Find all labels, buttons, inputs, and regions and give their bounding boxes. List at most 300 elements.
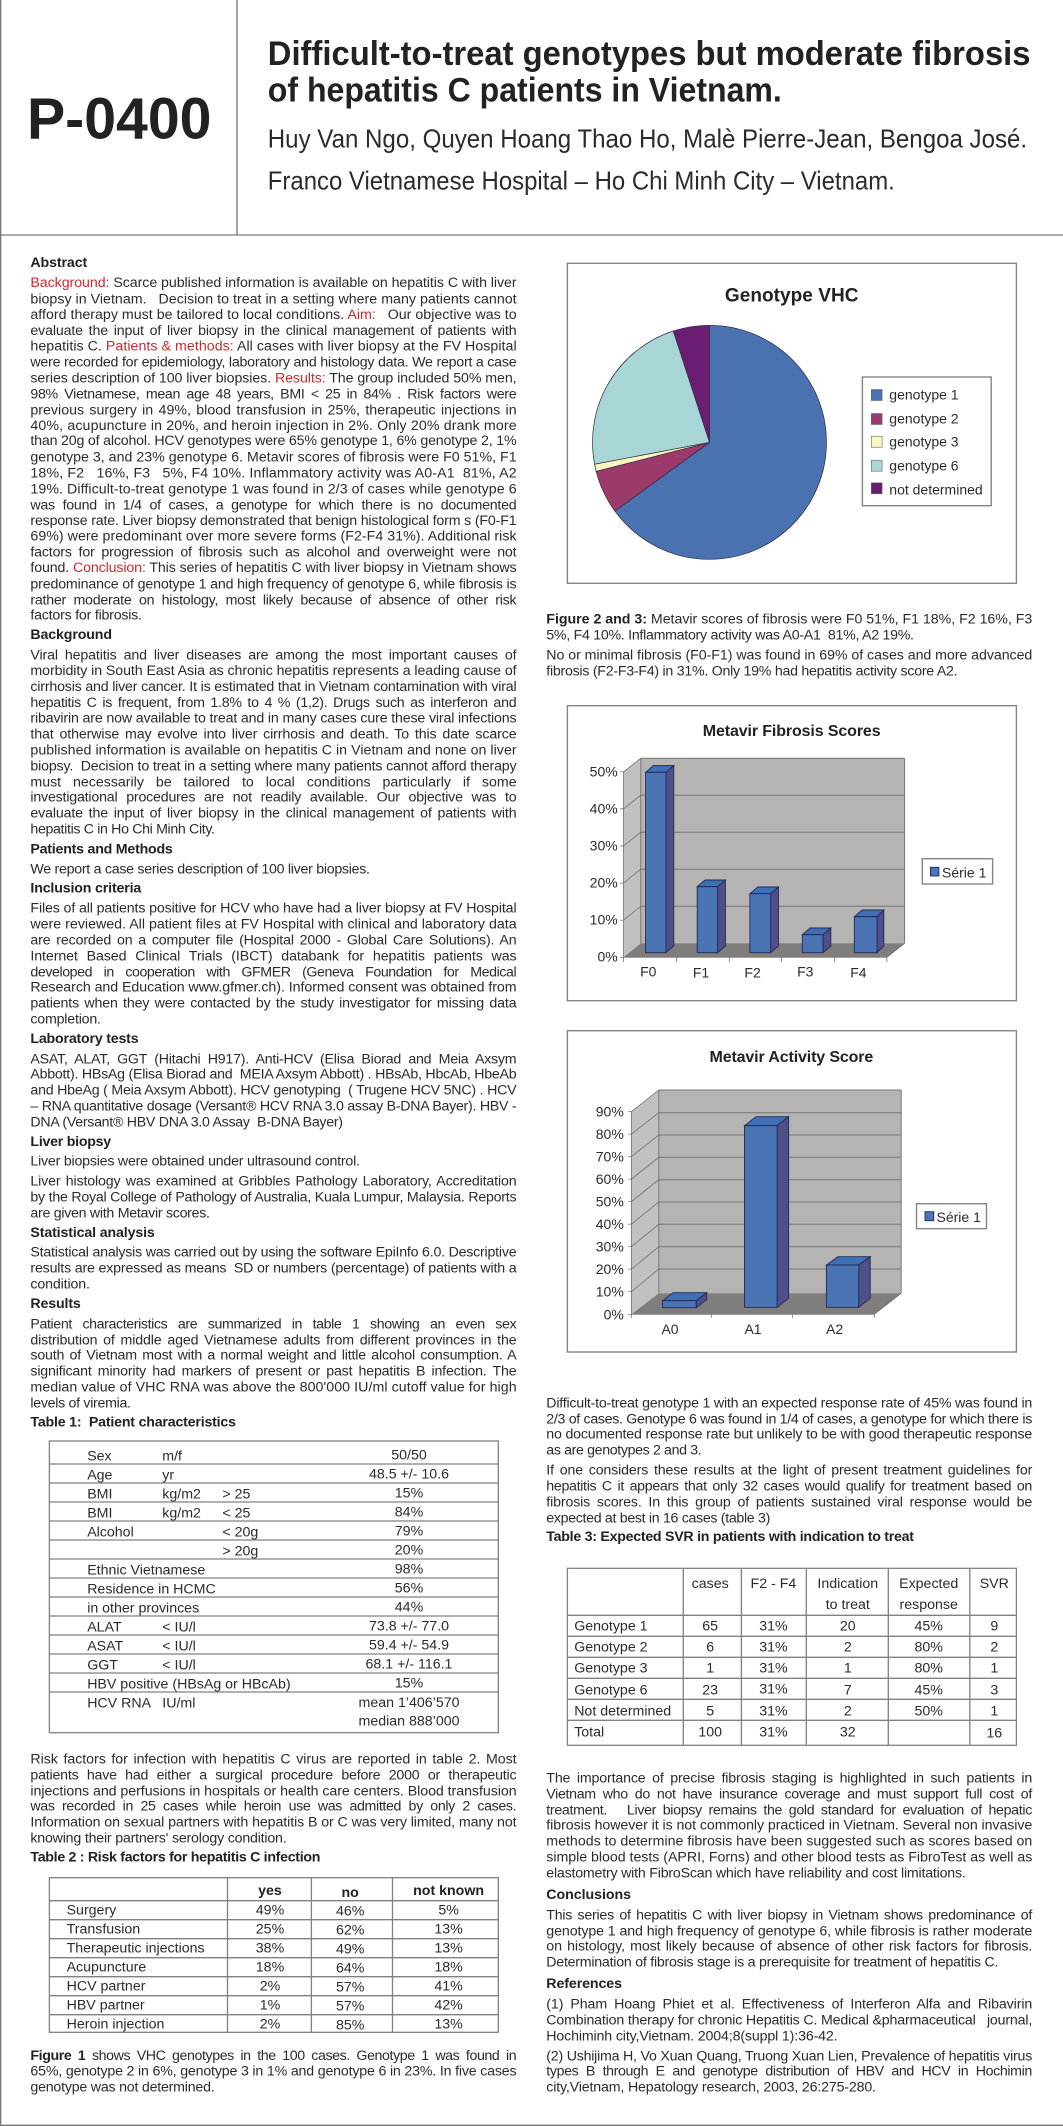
text block: fibrosis staging paragraph: Vietnam who do not have insurance coverage and must support full cost of	[546, 1786, 1032, 1802]
table 3: expected SVR: to treat	[826, 1597, 870, 1613]
bar chart plot	[596, 1090, 901, 1337]
y axis labels: 60%	[596, 1171, 624, 1187]
pie legend	[862, 377, 991, 506]
text block: reference 1: (1) Pham Hoang Phiet et al. Effectiveness of Interferon Alfa and Ribavirin	[546, 1996, 1032, 2012]
text block: abstract body: 40%, acupuncture in 20%, and heroin injection in 2%. Only 20% drank more	[30, 418, 517, 434]
table 1: patient characteristics: 68.1 +/- 116.1	[366, 1657, 453, 1673]
text block: abstract body: than 20g of alcohol. HCV genotypes were 65% genotype 1, 6% genotype 2, 1%	[30, 433, 517, 449]
text block: laboratory body: Abbott). HBsAg (Elisa Biorad and MEIA Axsym Abbott) . HBsAb, HbcAb, HbeAb	[30, 1066, 517, 1082]
text block: abstract body: hepatitis C. Patients & methods: All cases with liver biopsy at the FV Hospital	[30, 338, 517, 354]
affiliation: Franco Vietnamese Hospital – Ho Chi Minh City – Vietnam.	[268, 165, 895, 195]
heading: table 1: Table 1: Patient characteristics	[30, 1415, 236, 1431]
text block: genotype response paragraphs: as are genotypes 2 and 3.	[546, 1442, 702, 1458]
table 3: expected SVR: 1	[990, 1704, 998, 1720]
text block: inclusion body: Internet Based Clinical Trials (IBCT) databank for hepatitis patients was	[30, 948, 517, 964]
heading: laboratory tests: Laboratory tests	[30, 1031, 139, 1047]
table 2: risk factors: 49%	[336, 1942, 365, 1958]
heading: inclusion criteria: Inclusion criteria	[30, 880, 141, 896]
table 2: risk factors	[49, 1878, 498, 2034]
text block: background body: must necessarily be tailored to local conditions particularly if some	[30, 774, 517, 790]
panel: liver biopsy	[30, 1134, 517, 1221]
text block: inclusion body	[29, 900, 517, 1027]
table 1: patient characteristics: 50/50	[391, 1448, 427, 1464]
bars	[646, 766, 884, 953]
y axis labels	[590, 764, 618, 965]
text block: abstract body: factors for fibrosis.	[30, 607, 142, 623]
text block: background body: Viral hepatitis and liver diseases are among the most important causes of	[30, 647, 517, 663]
text block: inclusion body: developed in cooperation with GFMER (Geneva Foundation for Medical	[30, 964, 517, 980]
text block: fibrosis staging paragraph: fibrosis however it is not commonly practiced in Vietnam. Several non invasive	[546, 1817, 1032, 1833]
chart title: Genotype VHC	[725, 286, 859, 307]
heading: table 2: Table 2 : Risk factors for hepatitis C infection	[30, 1850, 320, 1866]
text block: methods intro: We report a case series description of 100 liver biopsies.	[30, 861, 370, 877]
text block: fibrosis staging paragraph	[546, 1770, 1032, 1881]
table 3: expected SVR: 23	[702, 1683, 718, 1699]
table 1: patient characteristics: 20%	[395, 1543, 424, 1559]
y axis labels: 10%	[596, 1284, 624, 1300]
table 2: risk factors: 38%	[256, 1940, 285, 1956]
table 3: expected SVR: Total	[574, 1725, 604, 1741]
text block: genotype response paragraphs: no documented response rate but unlikely to be with good therapeutic response	[546, 1426, 1032, 1442]
panel: conclusions	[546, 1887, 1032, 1970]
table 3: expected SVR: Genotype 6	[574, 1683, 648, 1699]
table 2: risk factors: 13%	[434, 2016, 463, 2032]
text block: risk factors paragraph: knowing their partners' serology condition.	[30, 1830, 287, 1846]
text block: abstract body: 69%) were predominant over more severe forms (F2-F4 31%). Additional risk	[30, 528, 518, 544]
table 3: expected SVR: SVR	[980, 1576, 1009, 1592]
text block: results body: median value of VHC RNA was above the 800'000 IU/ml cutoff value for high	[30, 1379, 517, 1395]
heading: patients and methods: Patients and Methods	[30, 841, 173, 857]
text block: figure 2 and 3 caption: No or minimal fibrosis (F0-F1) was found in 69% of cases and more advanced	[546, 647, 1032, 663]
text block: abstract body: biopsy in Vietnam. Decision to treat in a setting where many patients cannot	[30, 291, 517, 307]
table 3: expected SVR: 31%	[759, 1640, 788, 1656]
chart title: Metavir Activity Score	[710, 1049, 873, 1066]
table 3: expected SVR: F2 - F4	[751, 1576, 796, 1592]
y axis labels: 30%	[596, 1239, 624, 1255]
table 1: patient characteristics	[49, 1441, 498, 1733]
table 2: risk factors: 1%	[260, 1997, 281, 2013]
table 3: expected SVR: 6	[706, 1640, 714, 1656]
table 1: patient characteristics: kg/m2	[162, 1487, 201, 1503]
text block: figure 2 and 3 caption	[546, 611, 1032, 679]
table 2: risk factors: 2%	[260, 2016, 281, 2032]
title	[268, 35, 1030, 110]
pie legend: genotype 3	[889, 434, 959, 450]
table 1: patient characteristics: < IU/l	[162, 1658, 196, 1674]
table 2: risk factors: 13%	[434, 1940, 463, 1956]
y axis labels: 0%	[604, 1306, 624, 1322]
table 3: expected SVR: Genotype 1	[574, 1619, 648, 1635]
text block: liver biopsy body: are given with Metavir scores.	[30, 1205, 210, 1221]
text block: results body: levels of viremia.	[30, 1395, 131, 1411]
table 1: patient characteristics: 79%	[395, 1524, 424, 1540]
table 2: risk factors: 57%	[336, 1999, 365, 2015]
text block: figure 2 and 3 caption: fibrosis (F2-F3-F4) in 31%. Only 19% had hepatitis activity score A2.	[546, 663, 958, 679]
x axis labels: A2	[826, 1321, 843, 1337]
heading: background: Background	[30, 627, 112, 643]
header: title and authors	[268, 35, 1030, 195]
panel: pie chart genotype VHC	[567, 263, 1016, 583]
table 3: expected SVR: 2	[844, 1640, 852, 1656]
table 1: patient characteristics: 84%	[395, 1505, 424, 1521]
panel: background	[30, 627, 518, 837]
table 3: expected SVR	[567, 1568, 1016, 1745]
panel: inclusion criteria	[29, 880, 517, 1027]
table 2: risk factors: 57%	[336, 1980, 365, 1996]
table 1: patient characteristics: 59.4 +/- 54.9	[369, 1638, 449, 1654]
table 3: expected SVR: 45%	[914, 1619, 943, 1635]
table 3: expected SVR: 32	[840, 1725, 856, 1741]
table 2: risk factors: Surgery	[67, 1902, 117, 1918]
table 2: risk factors: Acupuncture	[67, 1959, 146, 1975]
text block: reference 2: types B through E and genotype distribution of HBV and HCV in Hochimin	[546, 2063, 1032, 2079]
x axis labels: F4	[850, 965, 867, 981]
table 1: patient characteristics: < IU/l	[162, 1639, 196, 1655]
text block: inclusion body: patients when they were contacted by the study investigator for missing data	[30, 995, 517, 1011]
table 1: patient characteristics: ASAT	[87, 1639, 124, 1655]
heading: conclusions: Conclusions	[546, 1887, 631, 1903]
text block: background body	[30, 647, 518, 837]
table 1: patient characteristics: > 20g	[222, 1544, 258, 1560]
panel: patients and methods	[30, 841, 370, 877]
table 2: risk factors: 5%	[438, 1902, 459, 1918]
table 1: patient characteristics: 15%	[395, 1486, 424, 1502]
text block: abstract body: rather moderate on histology, most likely because of absence of other risk	[30, 592, 518, 608]
table 2: risk factors: no	[342, 1885, 359, 1901]
table 3: expected SVR: 50%	[914, 1704, 943, 1720]
text block: figure 1 caption	[30, 2048, 517, 2095]
table 2: risk factors: 13%	[434, 1921, 463, 1937]
panel: bar chart metavir activity score	[567, 1031, 1016, 1352]
table 3: expected SVR: 80%	[914, 1661, 943, 1677]
table 1: patient characteristics: > 25	[222, 1487, 251, 1503]
table 2: risk factors: 49%	[256, 1902, 285, 1918]
chart title: Metavir Fibrosis Scores	[703, 723, 881, 740]
text block: abstract body	[29, 275, 518, 623]
text block: results body: Patient characteristics are summarized in table 1 showing an even sex	[30, 1316, 517, 1332]
table 1: patient characteristics: in other provinces	[87, 1601, 199, 1617]
text block: background body: published information is available on hepatitis C in Vietnam and none on liver	[30, 742, 517, 758]
text block: fibrosis staging paragraph: elastometry with FibroScan which have reliability and cost limitations.	[546, 1865, 966, 1881]
text block: abstract body: series description of 100 liver biopsies. Results: The group included 50% men,	[30, 370, 517, 386]
table 1: patient characteristics: Alcohol	[87, 1525, 134, 1541]
table 3: expected SVR: 9	[990, 1619, 998, 1635]
text block: fibrosis staging paragraph: simple blood tests (APRI, Forns) and other blood tests as FibroTest as well as	[546, 1849, 1032, 1865]
chart legend: Série 1	[936, 1209, 981, 1225]
table 2: risk factors: 18%	[434, 1959, 463, 1975]
table 1: patient characteristics: mean 1’406’570	[359, 1695, 460, 1711]
text block: genotype response paragraphs: expected at best in 16 cases (table 3)	[546, 1510, 770, 1526]
text block: abstract body: predominance of genotype 1 and high frequency of genotype 6, while fibrosis is	[30, 576, 517, 592]
text block: liver biopsy body: by the Royal College of Pathology of Australia, Kuala Lumpur, Malaysia. Reports	[30, 1189, 517, 1205]
table 1: patient characteristics: 98%	[395, 1562, 424, 1578]
text block: risk factors paragraph: patients have had either a surgical procedure before 2000 or therapeutic	[30, 1767, 517, 1783]
title: of hepatitis C patients in Vietnam.	[268, 72, 782, 110]
text block: genotype response paragraphs: If one considers these results at the light of present treatment guidelines for	[546, 1462, 1033, 1478]
table 3: expected SVR: 31%	[759, 1618, 788, 1634]
table 3: expected SVR: 80%	[914, 1640, 943, 1656]
table 3: expected SVR: 3	[990, 1683, 998, 1699]
y axis labels: 50%	[590, 764, 618, 780]
x axis labels: F1	[693, 965, 709, 981]
table 1: patient characteristics: < 25	[222, 1506, 251, 1522]
text block: genotype response paragraphs: 2/3 of cases. Genotype 6 was found in 1/4 of cases, a genotype for which there is	[546, 1411, 1032, 1427]
text block: background body: hepatitis C in Ho Chi Minh City.	[30, 821, 215, 837]
heading: table 3: Table 3: Expected SVR in patients with indication to treat	[546, 1529, 914, 1545]
table 3: expected SVR: 45%	[914, 1683, 943, 1699]
table 3: expected SVR: 1	[706, 1661, 714, 1677]
text block: abstract body: factors for progression of fibrosis such as alcohol and overweight were not	[30, 544, 517, 560]
pie legend: genotype 6	[889, 458, 959, 474]
text block: laboratory body: ASAT, ALAT, GGT (Hitachi H917). Anti-HCV (Elisa Biorad and Meia Axsym	[30, 1051, 517, 1067]
text block: reference 1: Combination therapy for chronic Hepatitis C. Medical &pharmaceutical journal,	[546, 2012, 1032, 2028]
text block: figure 2 and 3 caption: Figure 2 and 3: Metavir scores of fibrosis were F0 51%, F1 18%, F2 16%, F3	[546, 611, 1032, 627]
table 1: patient characteristics: median 888’000	[359, 1714, 460, 1730]
table 3: expected SVR: 100	[698, 1725, 722, 1741]
text block: genotype response paragraphs	[546, 1395, 1033, 1526]
text block: background body: cirrhosis and liver cancer. It is estimated that in Vietnam contamination with viral	[30, 679, 517, 695]
x axis labels: F0	[640, 964, 657, 980]
text block: abstract body: was found in 1/4 of cases, a genotype for which there is no documented	[29, 497, 517, 513]
table 2: risk factors: 41%	[434, 1978, 463, 1994]
text block: background body: evaluate the input of liver biopsy in the clinical management of patients with	[30, 805, 517, 821]
y axis labels: 70%	[596, 1149, 624, 1165]
text block: conclusions body: genotype 1 and high frequency of genotype 6, while fibrosis is rather moderate	[546, 1923, 1032, 1939]
table 2: risk factors: Heroin injection	[67, 2016, 164, 2032]
text block: abstract body: evaluate the input of liver biopsy in the clinical management of patients with	[30, 323, 517, 339]
text block: reference 1: Hochiminh city,Vietnam. 2004;8(suppl 1):36-42.	[546, 2028, 838, 2044]
table 1: patient characteristics: Residence in HCMC	[87, 1582, 216, 1598]
y axis labels: 30%	[590, 838, 618, 854]
text block: risk factors paragraph: was recorded in 25 cases while heroin use was admitted by only 2 cases.	[29, 1798, 517, 1814]
y axis labels: 40%	[596, 1216, 624, 1232]
x axis labels: F3	[797, 964, 814, 980]
heading: results: Results	[30, 1296, 81, 1312]
table 1: patient characteristics: kg/m2	[162, 1506, 201, 1522]
text block: inclusion body: Files of all patients positive for HCV who have had a liver biopsy at FV Hospital	[30, 900, 517, 916]
text block: background body: ribavirin are now available to treat and in many cases cure these viral infections	[30, 710, 517, 726]
y axis labels: 40%	[590, 800, 618, 816]
text block: fibrosis staging paragraph: methods to determine fibrosis have been suggested such as scores based on	[546, 1833, 1032, 1849]
text block: background body: hepatitis C is frequent, from 1.8% to 4 % (1,2). Drugs such as interferon and	[30, 695, 517, 711]
table 3: expected SVR: Not determined	[574, 1704, 671, 1720]
text block: reference 1	[546, 1996, 1032, 2044]
text block: abstract body: 19%. Difficult-to-treat genotype 1 was found in 2/3 of cases while genotype 6	[30, 481, 517, 497]
text block: abstract body: 98% Vietnamese, mean age 48 years, BMI < 25 in 84% . Risk factors were	[30, 386, 517, 402]
text block: inclusion body: Research and Education www.gfmer.ch). Informed consent was obtained from	[30, 979, 517, 995]
table 2: risk factors: 2%	[260, 1978, 281, 1994]
text block: results body	[30, 1316, 517, 1411]
text block: liver biopsy body: Liver histology was examined at Gribbles Pathology Laboratory, Accreditation	[30, 1173, 517, 1189]
table 1: patient characteristics: 73.8 +/- 77.0	[369, 1619, 449, 1635]
y axis labels	[596, 1104, 624, 1322]
chart legend	[916, 1204, 986, 1229]
text block: statistical body: results are expressed as means SD or numbers (percentage) of patients with a	[30, 1260, 517, 1276]
table 3: expected SVR: 65	[702, 1619, 718, 1635]
table 1: patient characteristics: < IU/l	[162, 1620, 196, 1636]
text block: statistical body: Statistical analysis was carried out by using the software EpiInfo 6.0. Descriptive	[30, 1244, 517, 1260]
pie legend: genotype 2	[889, 411, 959, 427]
y axis labels: 20%	[590, 874, 618, 890]
text block: conclusions body: This series of hepatitis C with liver biopsy in Vietnam shows predominance of	[546, 1907, 1032, 1923]
table 2: risk factors: Therapeutic injections	[67, 1940, 205, 1956]
table 3: expected SVR: 20	[840, 1619, 856, 1635]
table 1: patient characteristics: ALAT	[87, 1620, 122, 1636]
table 1: patient characteristics: Age	[87, 1468, 113, 1484]
table 3: expected SVR: cases	[692, 1576, 729, 1592]
text block: results body: south of Vietnam most with a normal weight and little alcohol consumption. A	[30, 1347, 517, 1363]
text block: abstract body: genotype 3, and 23% genotype 6. Metavir scores of fibrosis were F0 51%, F1	[30, 449, 517, 465]
text block: abstract body: response rate. Liver biopsy demonstrated that benign histological form s (F0-F1	[30, 513, 517, 529]
table 1: patient characteristics: Sex	[87, 1449, 112, 1465]
text block: background body: investigational procedures are not readily available. Our objective was to	[30, 789, 517, 805]
text block: abstract body: Background: Scarce published information is available on hepatitis C with liver	[30, 275, 517, 291]
text block: abstract body: 18%, F2 16%, F3 5%, F4 10%. Inflammatory activity was A0-A1 81%, A2	[30, 465, 517, 481]
text block: results body: significant minority had markers of present or past hepatitis B infection. The	[30, 1363, 517, 1379]
text block: abstract body: previous surgery in 49%, blood transfusion in 25%, therapeutic injections in	[30, 402, 517, 418]
table 1: patient characteristics: yr	[162, 1468, 174, 1484]
text block: figure 1 caption: Figure 1 shows VHC genotypes in the 100 cases. Genotype 1 was found in	[30, 2048, 517, 2064]
text block: fibrosis staging paragraph: The importance of precise fibrosis staging is highlighted in such patients in	[546, 1770, 1032, 1786]
y axis labels: 20%	[596, 1261, 624, 1277]
text block: inclusion body: completion.	[30, 1011, 101, 1027]
text block: laboratory body: and HbeAg ( Meia Axsym Abbott). HCV genotyping ( Trugene HCV 5NC) . HCV	[30, 1082, 517, 1098]
text block: reference 2: city,Vietnam, Hepatology research, 2003, 26:275-280.	[546, 2079, 876, 2095]
table 3: expected SVR: 2	[844, 1704, 852, 1720]
table 1: patient characteristics: m/f	[162, 1449, 182, 1465]
table 1: patient characteristics: HBV positive (HBsAg or HBcAb)	[87, 1677, 291, 1693]
text block: reference 2	[546, 2048, 1032, 2095]
text block: liver biopsy body	[30, 1153, 517, 1221]
text block: liver biopsy body: Liver biopsies were obtained under ultrasound control.	[30, 1153, 360, 1169]
table 2: risk factors: 42%	[434, 1997, 463, 2013]
text block: inclusion body: are recorded on a computer file (Hospital 2000 - Global Care Solutions). An	[30, 932, 517, 948]
y axis labels: 90%	[596, 1104, 624, 1120]
table 2: risk factors: 85%	[336, 2018, 365, 2034]
panel: laboratory tests	[30, 1031, 517, 1130]
x axis labels: A0	[661, 1321, 679, 1337]
poster number: P-0400	[27, 86, 212, 152]
text block: laboratory body: – RNA quantitative dosage (Versant® HCV RNA 3.0 assay B-DNA Bayer). HBV -	[30, 1098, 517, 1114]
text block: inclusion body: were reviewed. All patient files at FV Hospital with clinical and laboratory data	[29, 916, 517, 932]
text block: figure 1 caption: 65%, genotype 2 in 6%, genotype 3 in 1% and genotype 6 in 23%. In five cases	[30, 2063, 517, 2079]
text block: background body: morbidity in South East Asia as chronic hepatitis represents a leading cause of	[30, 663, 517, 679]
text block: abstract body: were recorded for epidemiology, laboratory and histology data. We report a case	[29, 354, 517, 370]
table 2: risk factors: yes	[258, 1883, 282, 1899]
text block: genotype response paragraphs: fibrosis scores. In this group of patients sustained viral response would be	[546, 1494, 1032, 1510]
table 3: expected SVR: 2	[990, 1640, 998, 1656]
table 1: patient characteristics: 44%	[395, 1600, 424, 1616]
text block: risk factors paragraph: Risk factors for infection with hepatitis C virus are reported in table 2. Most	[30, 1751, 517, 1767]
table 3: expected SVR: Indication	[817, 1576, 878, 1592]
table 3: expected SVR: Genotype 2	[574, 1640, 648, 1656]
text block: background body: biopsy. Decision to treat in a setting where many patients cannot afford therapy	[30, 758, 518, 774]
table 3: expected SVR: 31%	[759, 1661, 788, 1677]
table 3: expected SVR: 1	[990, 1661, 998, 1677]
text block: figure 2 and 3 caption: 5%, F4 10%. Inflammatory activity was A0-A1 81%, A2 19%.	[546, 627, 914, 643]
text block: background body: that otherwise may evolve into liver cirrhosis and death. To this date scarce	[30, 726, 517, 742]
table 3: expected SVR: 7	[844, 1683, 852, 1699]
text block: statistical body: condition.	[30, 1276, 90, 1292]
text block: abstract body: found. Conclusion: This series of hepatitis C with liver biopsy in Vietnam shows	[30, 560, 517, 576]
pie chart	[593, 325, 826, 559]
table 1: patient characteristics: 48.5 +/- 10.6	[369, 1467, 449, 1483]
table 2: risk factors: HBV partner	[67, 1997, 145, 2013]
table 1: patient characteristics: Ethnic Vietnamese	[87, 1563, 205, 1579]
text block: conclusions body: Determination of fibrosis stage is a prerequisite for treatment of hepatitis C.	[546, 1954, 998, 1970]
text block: laboratory body	[30, 1051, 517, 1130]
text block: abstract body: afford therapy must be tailored to local conditions. Aim: Our objective was to	[30, 307, 517, 323]
table 3: expected SVR: response	[900, 1597, 958, 1613]
table 2: risk factors: 64%	[336, 1961, 365, 1977]
table 3: expected SVR: Expected	[899, 1576, 958, 1592]
table 2: risk factors: HCV partner	[67, 1978, 146, 1994]
table 2: risk factors: not known	[413, 1883, 484, 1899]
text block: risk factors paragraph: Information on sexual partners with hepatitis B or C was very limited, many not	[30, 1814, 517, 1830]
heading: statistical analysis: Statistical analysis	[30, 1225, 155, 1241]
text block: statistical body	[30, 1244, 517, 1292]
table 2: risk factors: 25%	[256, 1921, 285, 1937]
text block: results body: distribution of middle aged Vietnamese adults from different provinces in the	[30, 1332, 517, 1348]
table 3: expected SVR: 16	[986, 1725, 1002, 1741]
title: Difficult-to-treat genotypes but moderate fibrosis	[268, 35, 1030, 73]
table 2: risk factors: 46%	[336, 1904, 365, 1920]
y axis labels: 10%	[590, 911, 618, 927]
panel: statistical analysis	[30, 1225, 517, 1292]
table 3: expected SVR: Genotype 3	[574, 1661, 648, 1677]
x axis labels: F2	[744, 965, 761, 981]
table 1: patient characteristics: 56%	[395, 1581, 424, 1597]
table 2: risk factors: Transfusion	[67, 1921, 140, 1937]
panel: references	[546, 1976, 1032, 2095]
table 1: patient characteristics: GGT	[87, 1658, 118, 1674]
text block: conclusions body	[546, 1907, 1032, 1970]
text block: laboratory body: DNA (Versant® HBV DNA 3.0 Assay B-DNA Bayer)	[30, 1114, 343, 1130]
text block: figure 1 caption: genotype was not determined.	[30, 2079, 215, 2095]
y axis labels: 80%	[596, 1126, 624, 1142]
table 3: expected SVR: 31%	[759, 1704, 788, 1720]
table 1: patient characteristics: IU/ml	[162, 1696, 195, 1712]
text block: risk factors paragraph	[29, 1751, 517, 1846]
heading: abstract: Abstract	[30, 255, 87, 271]
chart legend: Série 1	[942, 864, 987, 880]
text block: genotype response paragraphs: Difficult-to-treat genotype 1 with an expected response rate of 45% was found in	[546, 1395, 1032, 1411]
text block: fibrosis staging paragraph: treatment. Liver biopsy remains the gold standard for evaluation of hepatic	[546, 1802, 1032, 1818]
text block: risk factors paragraph: injections and perfusions in hospitals or health care centers. Blood transfusion	[30, 1783, 517, 1799]
table 3: expected SVR: 31%	[759, 1682, 788, 1698]
table 1: patient characteristics: < 20g	[222, 1525, 258, 1541]
table 1: patient characteristics: BMI	[87, 1506, 112, 1522]
table 1: patient characteristics: 15%	[395, 1676, 424, 1692]
y axis labels: 0%	[597, 949, 618, 965]
x axis labels	[640, 964, 867, 981]
table 3: expected SVR: 31%	[759, 1725, 788, 1741]
chart legend	[922, 859, 993, 884]
x axis labels	[661, 1321, 843, 1337]
pie legend: genotype 1	[889, 386, 959, 402]
table 2: risk factors: 62%	[336, 1923, 365, 1939]
table 1: patient characteristics: BMI	[87, 1487, 112, 1503]
panel: abstract	[29, 255, 518, 623]
table 3: expected SVR: 1	[844, 1661, 852, 1677]
x axis labels: A1	[744, 1321, 762, 1337]
heading: references: References	[546, 1976, 622, 1992]
pie legend: not determined	[889, 481, 983, 497]
bars	[663, 1117, 870, 1308]
panel: results	[30, 1296, 517, 1411]
y axis labels: 50%	[596, 1194, 624, 1210]
bar chart plot	[590, 758, 905, 981]
